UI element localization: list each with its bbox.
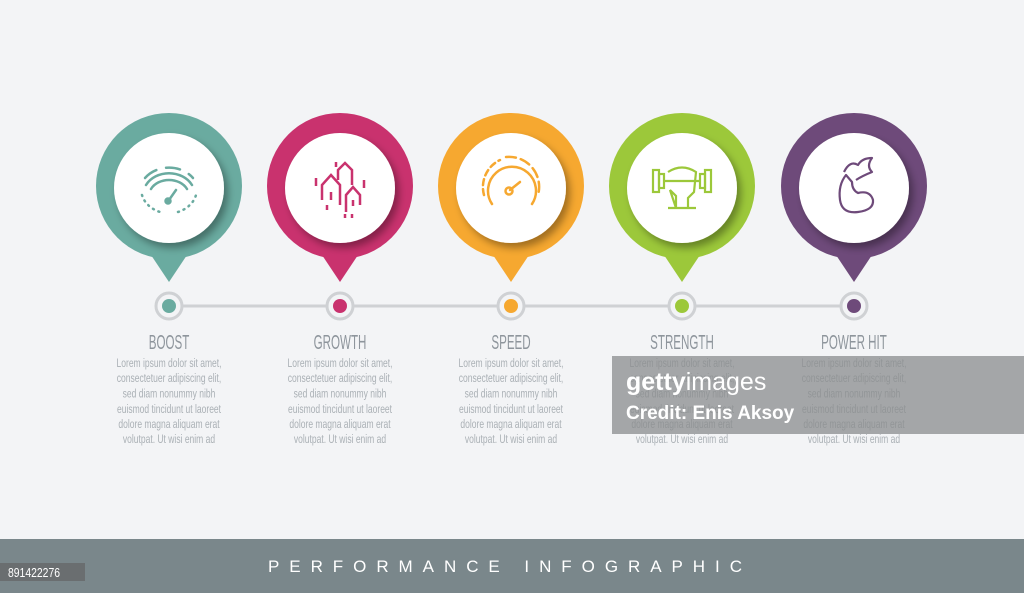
text block: speed: sed diam nonummy nibh (465, 388, 558, 401)
text block: growth: volutpat. Ut wisi enim ad (294, 434, 386, 446)
heading: speed: SPEED (491, 332, 531, 354)
heading: boost: BOOST (149, 332, 189, 354)
text block: speed: volutpat. Ut wisi enim ad (465, 434, 557, 446)
text block: power hit: euismod tincidunt ut laoreet (802, 404, 906, 416)
pin: speed (438, 113, 584, 282)
icon: dumbbell fist (653, 168, 711, 208)
text block: growth: consectetuer adipiscing elit, (288, 373, 392, 385)
id label (0, 563, 85, 581)
text block: growth: sed diam nonummy nibh (294, 388, 387, 401)
timeline dot: power hit (841, 293, 867, 319)
text block: speed: Lorem ipsum dolor sit amet, (459, 358, 563, 370)
text block: boost: Lorem ipsum dolor sit amet, (117, 358, 221, 370)
heading: power hit: POWER HIT (821, 332, 887, 354)
text block: strength: dolore magna aliquam erat (631, 419, 733, 431)
watermark overlay: Credit: Enis Aksoy (626, 403, 795, 424)
text block: boost: sed diam nonummy nibh (123, 388, 216, 401)
panel: power hit (781, 113, 927, 446)
pin: growth (267, 113, 413, 282)
timeline dot: growth (327, 293, 353, 319)
heading: growth: GROWTH (314, 332, 366, 354)
text block: growth: dolore magna aliquam erat (289, 419, 391, 431)
watermark overlay (612, 356, 1024, 434)
text block: boost (117, 358, 221, 446)
text block: speed (459, 358, 563, 446)
text block: speed: dolore magna aliquam erat (460, 419, 562, 431)
icon: flexed arm with flame (840, 158, 873, 212)
timeline dot: strength (669, 293, 695, 319)
timeline dot: speed (498, 293, 524, 319)
panel: strength (609, 113, 755, 446)
text block: power hit: dolore magna aliquam erat (803, 419, 905, 431)
text block: power hit: volutpat. Ut wisi enim ad (808, 434, 900, 446)
text block: power hit: sed diam nonummy nibh (808, 388, 901, 401)
text block: speed: euismod tincidunt ut laoreet (459, 404, 563, 416)
text block: strength: volutpat. Ut wisi enim ad (636, 434, 728, 446)
text block: boost: consectetuer adipiscing elit, (117, 373, 221, 385)
text block: strength (630, 358, 734, 446)
text block: strength: euismod tincidunt ut laoreet (630, 404, 734, 416)
icon: gauge (142, 168, 196, 212)
heading: strength: STRENGTH (650, 332, 714, 354)
id label: 891422276 (8, 566, 60, 580)
text block: power hit: consectetuer adipiscing elit, (802, 373, 906, 385)
text block: speed: consectetuer adipiscing elit, (459, 373, 563, 385)
text block: boost: dolore magna aliquam erat (118, 419, 220, 431)
text block: growth: euismod tincidunt ut laoreet (288, 404, 392, 416)
icon: speedometer (483, 157, 539, 204)
pin: power hit (781, 113, 927, 282)
timeline line (169, 304, 854, 308)
panel: boost (96, 113, 242, 446)
text block: power hit: Lorem ipsum dolor sit amet, (802, 358, 906, 370)
pin: boost (96, 113, 242, 282)
watermark overlay: gettyimages (626, 368, 766, 396)
text block: strength: Lorem ipsum dolor sit amet, (630, 358, 734, 370)
text block: strength: consectetuer adipiscing elit, (630, 373, 734, 385)
timeline dot: boost (156, 293, 182, 319)
panel: speed (438, 113, 584, 446)
text block: power hit (802, 358, 906, 446)
text block: boost: euismod tincidunt ut laoreet (117, 404, 221, 416)
footer band (0, 539, 1024, 593)
footer title: PERFORMANCE INFOGRAPHIC (268, 557, 742, 576)
text block: growth (288, 358, 392, 446)
icon: arrows up (316, 162, 364, 218)
panel: growth (267, 113, 413, 446)
text block: growth: Lorem ipsum dolor sit amet, (288, 358, 392, 370)
pin: strength (609, 113, 755, 282)
text block: strength: sed diam nonummy nibh (636, 388, 729, 401)
text block: boost: volutpat. Ut wisi enim ad (123, 434, 215, 446)
